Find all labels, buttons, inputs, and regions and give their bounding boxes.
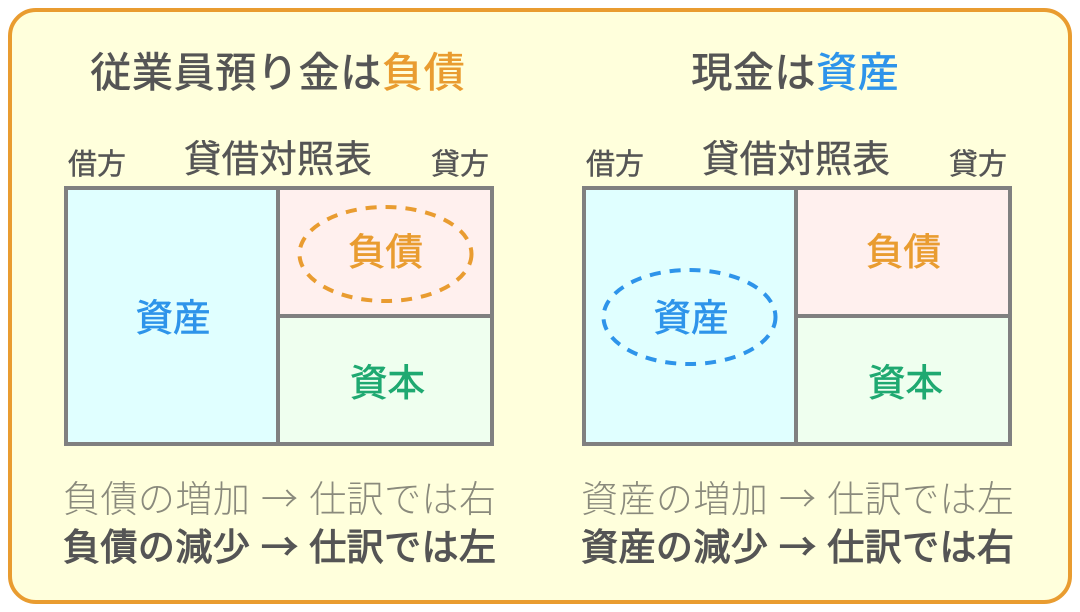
cell: assets: 資産 <box>654 297 728 339</box>
label: balance sheet title: 貸借対照表 <box>184 138 372 180</box>
callout: dashed ellipse on assets <box>604 270 776 364</box>
cell: equity: 資本 <box>350 362 425 404</box>
cell: liabilities: 負債 <box>866 231 941 273</box>
cell: assets <box>584 188 796 444</box>
cell: liabilities <box>278 188 492 316</box>
panel: left employee deposits <box>63 49 496 571</box>
panel: right cash <box>581 49 1014 571</box>
text: increase rule: 負債の増加 → 仕訳では右 <box>63 469 496 523</box>
text: decrease rule: 資産の減少 → 仕訳では右 <box>581 517 1014 571</box>
text: decrease rule: 負債の減少 → 仕訳では左 <box>63 517 496 571</box>
label: debit: 借方 <box>68 148 126 181</box>
cell: liabilities: 負債 <box>348 231 423 273</box>
heading: right: 現金は資産 <box>691 49 899 96</box>
label: credit: 貸方 <box>949 148 1007 181</box>
label: balance sheet title: 貸借対照表 <box>702 138 890 180</box>
text: increase rule: 資産の増加 → 仕訳では左 <box>581 469 1014 523</box>
heading: left: 従業員預り金は負債 <box>90 49 465 96</box>
cell: liabilities <box>796 188 1010 316</box>
cell: equity: 資本 <box>868 362 943 404</box>
cell: equity <box>278 316 492 444</box>
label: credit: 貸方 <box>431 148 489 181</box>
cell: equity <box>796 316 1010 444</box>
label: debit: 借方 <box>586 148 644 181</box>
callout: dashed ellipse on liabilities <box>300 207 472 301</box>
cell: assets: 資産 <box>136 297 210 339</box>
cell: assets <box>66 188 278 444</box>
